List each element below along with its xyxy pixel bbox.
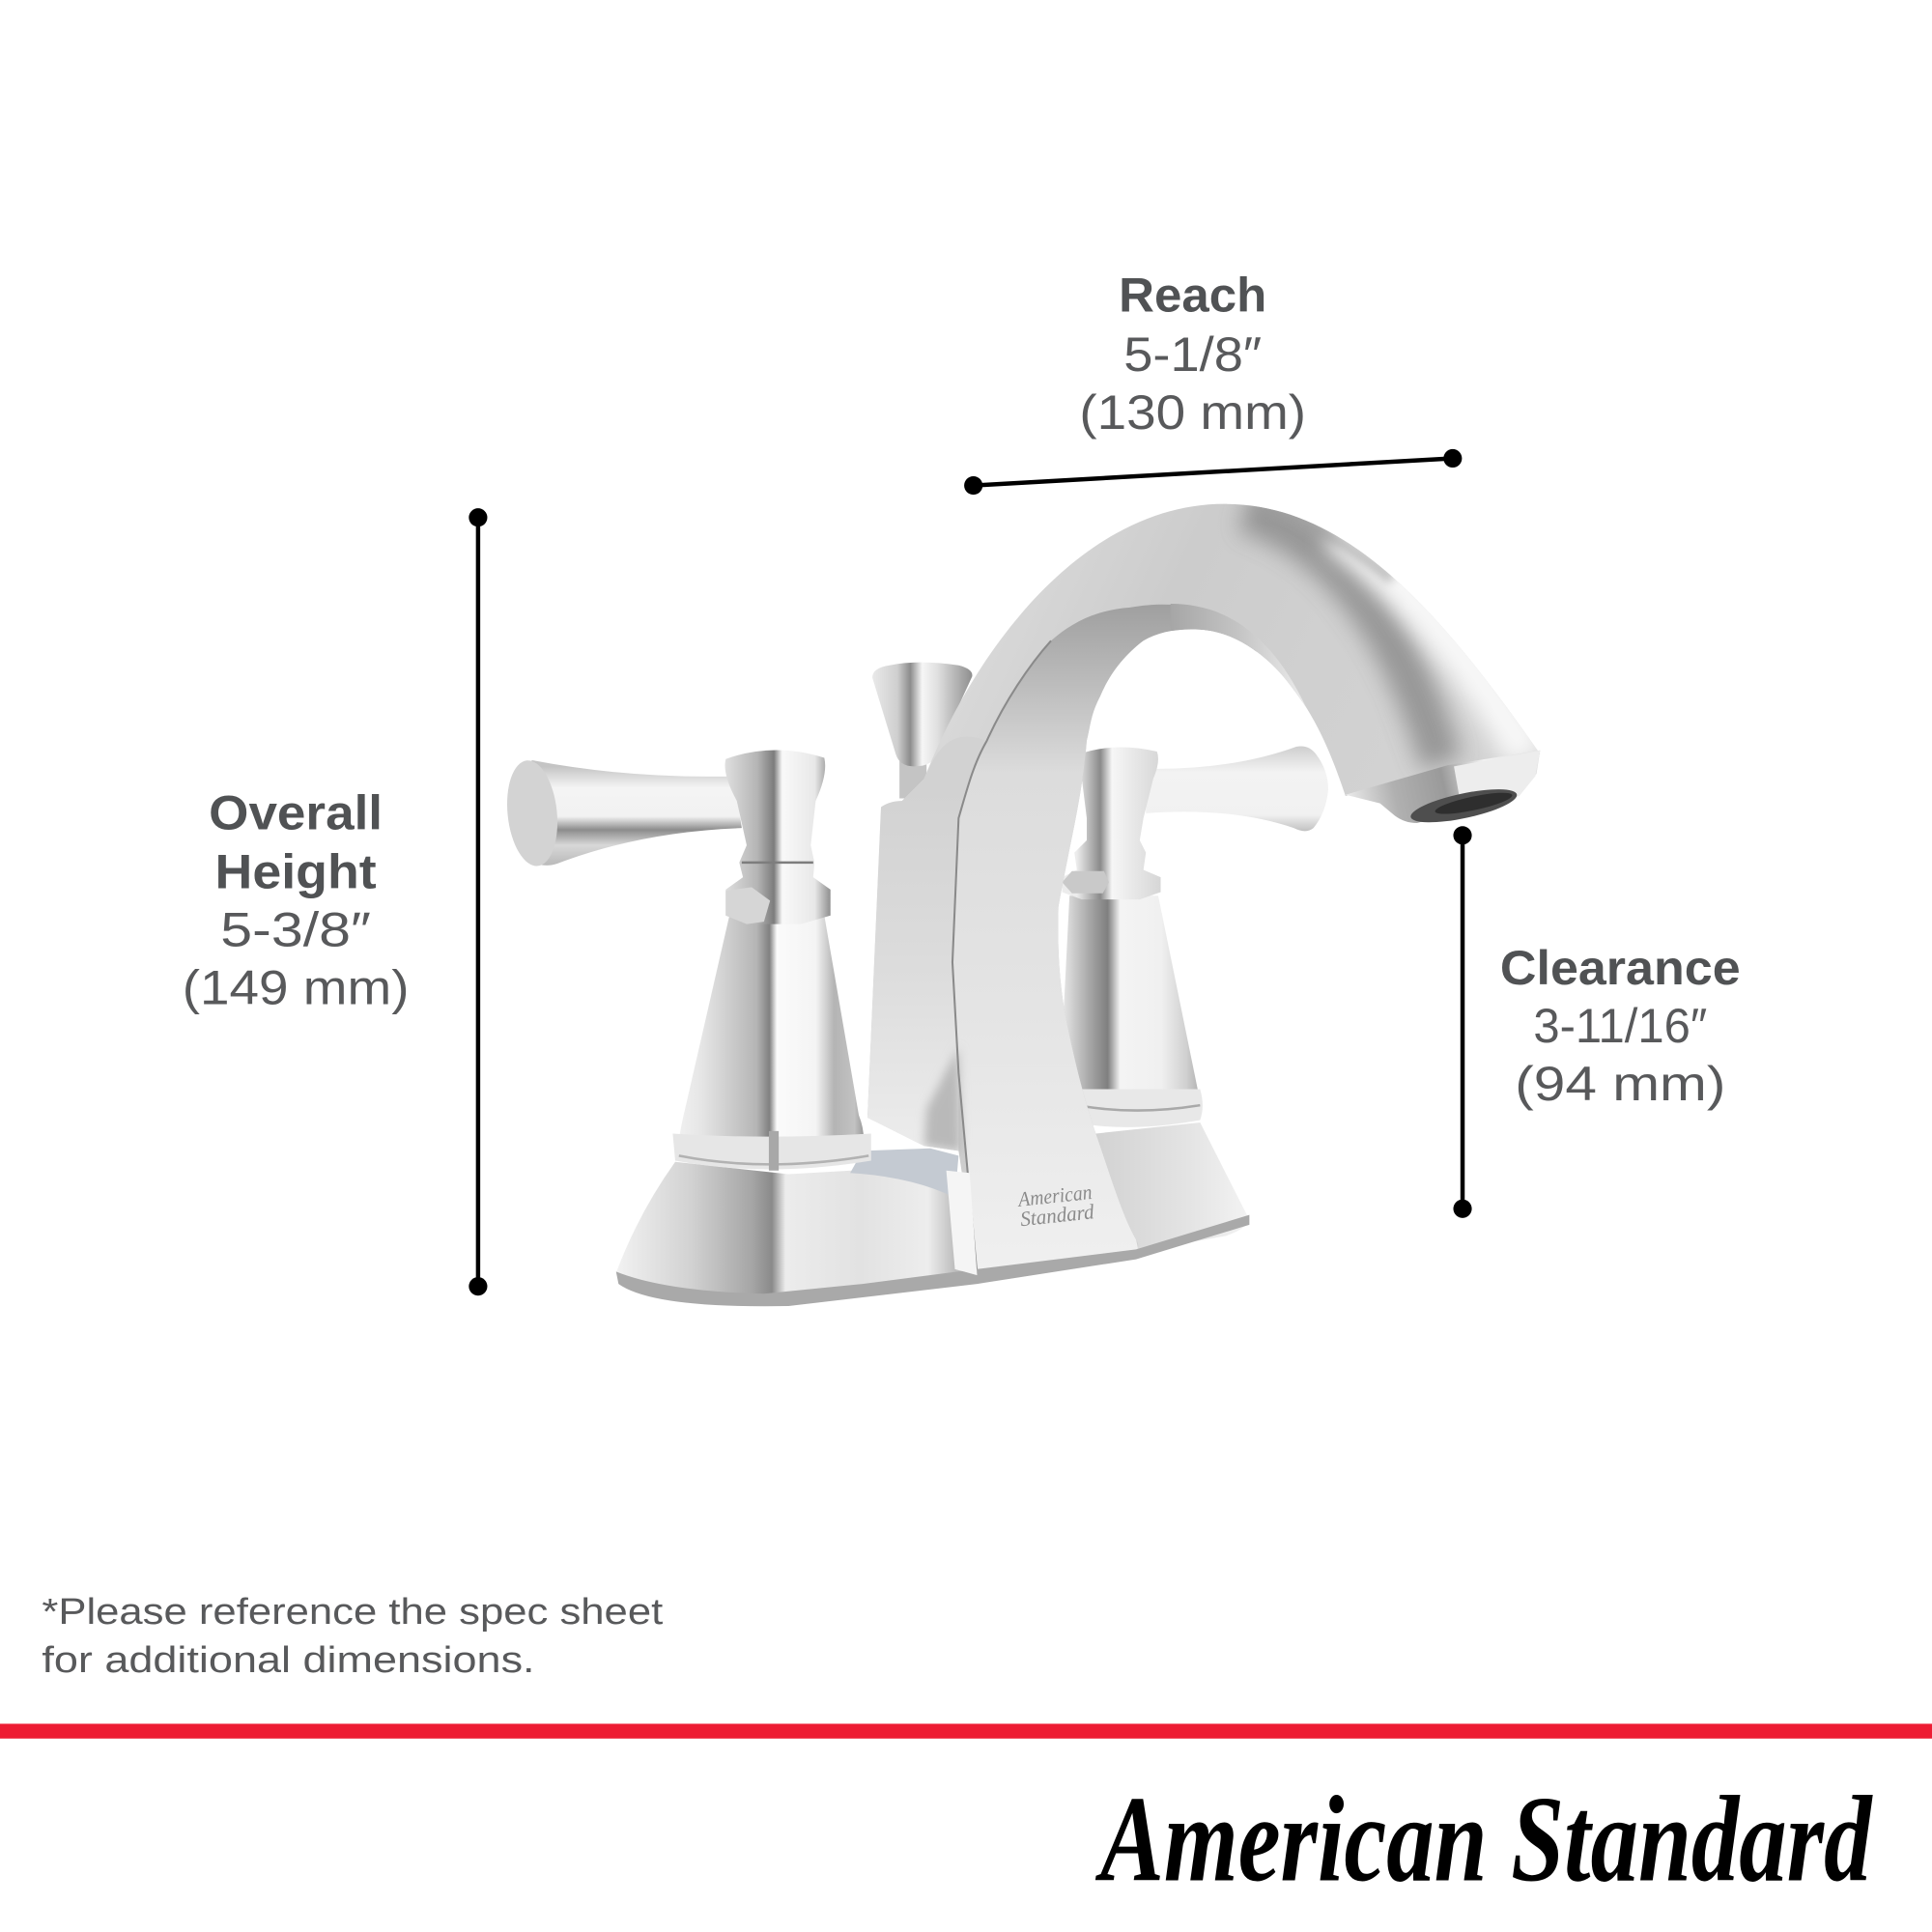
dimension line: clearance — [1453, 826, 1472, 1218]
spout column — [952, 605, 1257, 1275]
label: reach: Reach — [1119, 269, 1266, 323]
icon: left handle — [502, 750, 871, 1171]
side body — [867, 798, 958, 1151]
left bell — [679, 916, 864, 1140]
label: clearance: Clearance — [1500, 941, 1741, 995]
label: overall height: Overall — [209, 785, 383, 839]
left lever — [509, 760, 742, 866]
label: reach: (130 mm) — [1079, 385, 1306, 440]
right lever — [1146, 746, 1328, 831]
label: overall height — [183, 785, 409, 1015]
icon: rear pop-up knob — [872, 663, 972, 799]
label: clearance: 3-11/16″ — [1533, 999, 1707, 1053]
label: overall height: 5-3/8″ — [220, 903, 371, 957]
footnote — [42, 1591, 664, 1681]
logo on faucet — [1015, 1180, 1095, 1231]
label: overall height: (149 mm) — [183, 961, 409, 1015]
spout underside — [1171, 604, 1306, 707]
left head — [725, 750, 831, 924]
logo on faucet: American — [1015, 1180, 1094, 1211]
label: reach — [1079, 269, 1306, 440]
icon: spout arch — [867, 504, 1540, 1275]
faucet illustration — [502, 504, 1540, 1306]
spout ridge line — [952, 640, 1051, 1275]
spout shading — [867, 505, 1528, 1275]
label: reach: 5-1/8″ — [1123, 327, 1262, 382]
dimension line: overall height — [469, 508, 487, 1295]
right head — [1062, 748, 1161, 899]
red divider bar — [0, 1723, 1932, 1739]
dimension line: reach — [964, 449, 1462, 495]
icon: right handle — [1060, 746, 1328, 1127]
label: clearance — [1500, 941, 1741, 1111]
icon: spout tip and aerator — [1346, 751, 1540, 829]
footnote: for additional dimensions. — [42, 1639, 535, 1681]
icon: right deck plate — [1084, 1122, 1249, 1252]
logo on faucet: Standard — [1019, 1200, 1095, 1231]
label: clearance: (94 mm) — [1515, 1057, 1725, 1111]
label: overall height: Height — [215, 845, 377, 899]
footnote: *Please reference the spec sheet — [42, 1591, 664, 1633]
icon: left deck plate — [616, 1149, 1249, 1306]
right bell — [1060, 895, 1198, 1090]
